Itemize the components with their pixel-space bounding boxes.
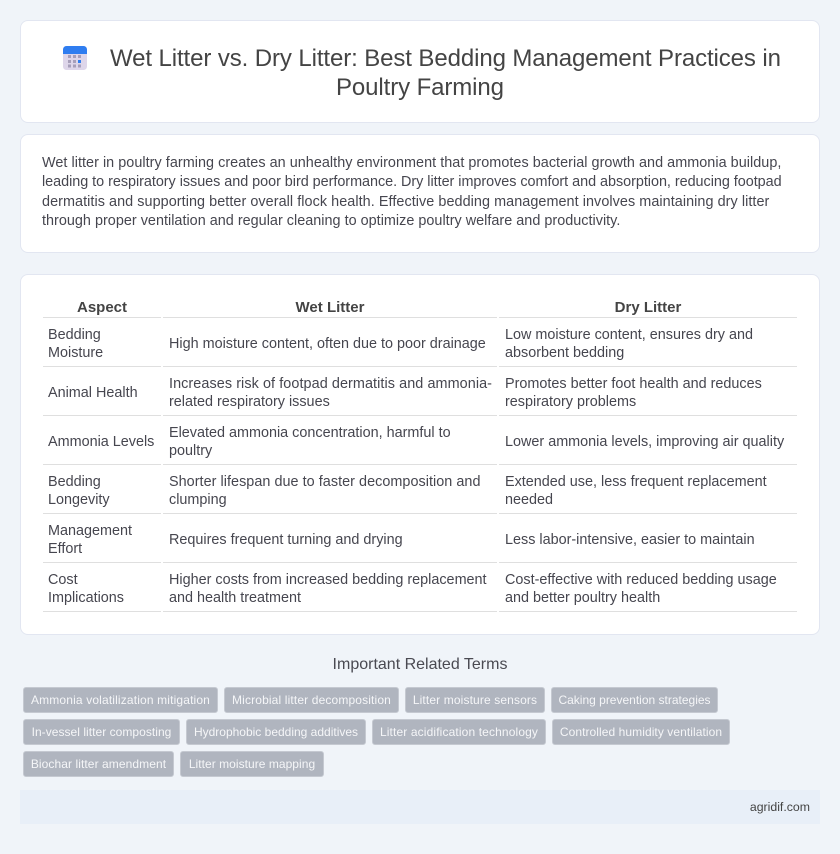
comparison table: Increases risk of footpad dermatitis and ammonia- — [169, 376, 492, 392]
related terms tags — [23, 687, 730, 777]
comparison table: absorbent bedding — [505, 345, 624, 361]
comparison table: Dry Litter — [615, 299, 681, 316]
comparison table: Animal Health — [48, 385, 138, 401]
comparison table: Bedding — [48, 474, 101, 490]
related terms tags: Litter acidification technology — [380, 725, 538, 739]
comparison table: Cost — [48, 572, 78, 588]
comparison table: clumping — [169, 492, 227, 508]
related terms heading: Important Related Terms — [333, 656, 507, 673]
comparison table: related respiratory issues — [169, 394, 330, 410]
comparison table: Longevity — [48, 492, 110, 508]
comparison table: and better poultry health — [505, 590, 660, 606]
comparison table: and health treatment — [169, 590, 301, 606]
intro text: Wet litter in poultry farming creates an unhealthy environment that promotes bacterial growth and ammonia buildup, — [42, 155, 781, 171]
comparison table: Extended use, less frequent replacement — [505, 474, 767, 490]
intro text: leading to respiratory issues and poor bird performance. Dry litter improves comfort and absorption, reducing footpad — [42, 174, 782, 190]
comparison table: Low moisture content, ensures dry and — [505, 327, 753, 343]
comparison table: Moisture — [48, 345, 103, 361]
related terms tags: Caking prevention strategies — [558, 693, 711, 707]
header card — [20, 20, 820, 123]
comparison table: Requires frequent turning and drying — [169, 532, 403, 548]
comparison table: respiratory problems — [505, 394, 636, 410]
comparison table — [43, 299, 797, 612]
comparison table: Shorter lifespan due to faster decomposition and — [169, 474, 481, 490]
footer — [20, 790, 820, 824]
title: Poultry Farming — [336, 74, 504, 101]
intro text: through proper ventilation and regular cleaning to optimize poultry welfare and productivity. — [42, 213, 620, 229]
comparison table: Cost-effective with reduced bedding usage — [505, 572, 777, 588]
comparison table: Implications — [48, 590, 124, 606]
title: Wet Litter vs. Dry Litter: Best Bedding Management Practices in — [110, 45, 781, 72]
comparison table: Wet Litter — [296, 299, 364, 316]
related terms tags: In-vessel litter composting — [32, 725, 171, 739]
related terms tags: Biochar litter amendment — [31, 757, 166, 771]
icon: calendar — [63, 46, 87, 70]
comparison table: Management — [48, 523, 132, 539]
comparison table: Aspect — [77, 299, 127, 316]
comparison table: Bedding — [48, 327, 101, 343]
intro text: dermatitis and supporting better overall flock health. Effective bedding management involves maintaining dry litter — [42, 194, 769, 210]
related terms tags: Litter moisture mapping — [189, 757, 315, 771]
intro text — [42, 155, 782, 229]
related terms tags: Microbial litter decomposition — [232, 693, 391, 707]
comparison table: poultry — [169, 443, 212, 459]
comparison table: Promotes better foot health and reduces — [505, 376, 762, 392]
comparison table: High moisture content, often due to poor drainage — [169, 336, 486, 352]
comparison table: Lower ammonia levels, improving air quality — [505, 434, 784, 450]
related terms tags: Ammonia volatilization mitigation — [31, 693, 210, 707]
comparison table: Ammonia Levels — [48, 434, 154, 450]
related terms tags: Controlled humidity ventilation — [560, 725, 722, 739]
comparison table: needed — [505, 492, 553, 508]
related terms tags: Litter moisture sensors — [413, 693, 537, 707]
comparison table: Effort — [48, 541, 82, 557]
related terms tags: Hydrophobic bedding additives — [194, 725, 358, 739]
comparison table: Less labor-intensive, easier to maintain — [505, 532, 755, 548]
comparison table: Higher costs from increased bedding replacement — [169, 572, 487, 588]
comparison table: Elevated ammonia concentration, harmful to — [169, 425, 451, 441]
footer credit: agridif.com — [750, 800, 810, 814]
title — [110, 45, 781, 101]
table card — [20, 274, 820, 635]
intro card — [20, 134, 820, 253]
